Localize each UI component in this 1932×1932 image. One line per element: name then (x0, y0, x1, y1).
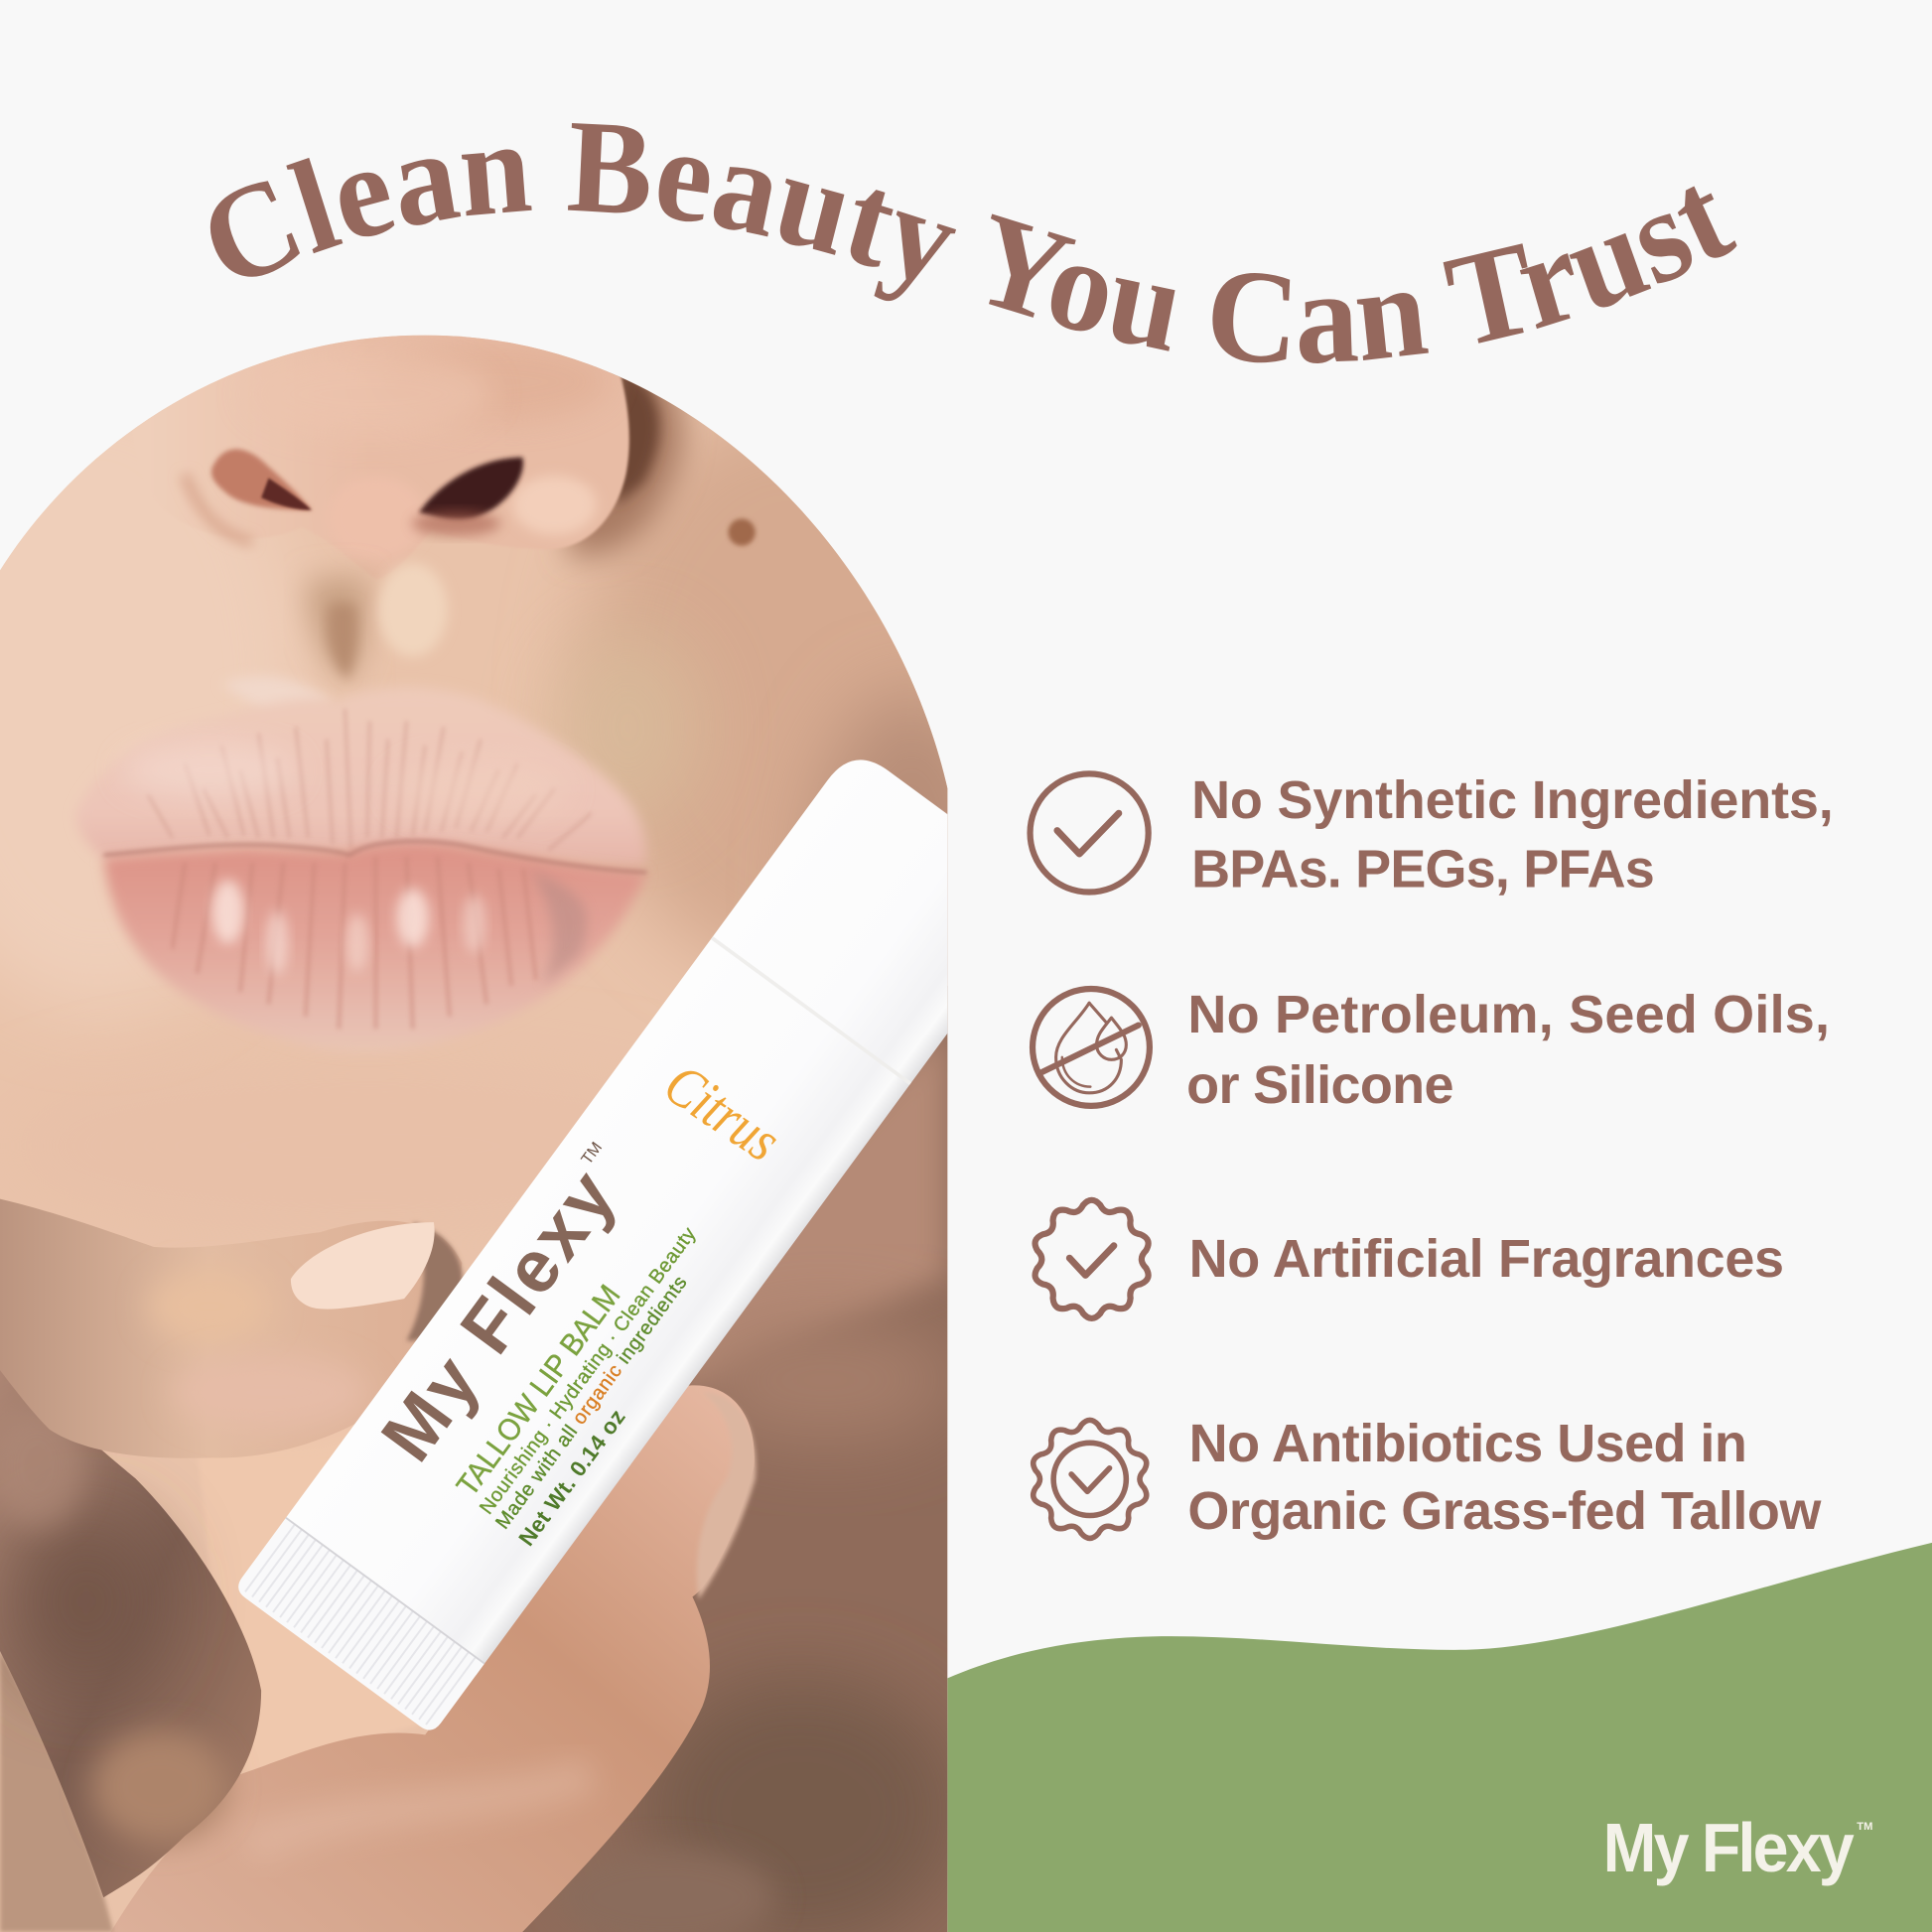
lower finger (111, 1385, 756, 1932)
upper lip (76, 687, 645, 865)
ribbed cap (233, 1518, 484, 1735)
wrist wedge (0, 1651, 113, 1932)
balm label: flavor: Citrus (653, 1050, 792, 1173)
tube body (286, 759, 947, 1676)
left nostril (211, 449, 312, 510)
text: synthetic ingredients: BPAs. PEGs, PFAs (1191, 840, 1655, 899)
icon: crossed oil drops (1033, 989, 1150, 1106)
nail (291, 1222, 435, 1310)
text: petroleum: or Silicone (1186, 1055, 1453, 1115)
benefit 2 (1033, 985, 1830, 1115)
text: fragrances: No Artificial Fragrances (1189, 1229, 1784, 1289)
cheek shadow beside nose (567, 336, 683, 556)
philtrum (230, 562, 448, 705)
face shading (0, 417, 947, 1072)
balm label: brand: My Flexy (365, 1156, 630, 1475)
thumb (0, 1199, 463, 1458)
balm label: ingredients: Made with all organic ingredients (491, 1272, 692, 1533)
middle finger (0, 1365, 261, 1897)
nose (141, 336, 631, 550)
benefit 4 (1034, 1414, 1822, 1541)
seam (712, 938, 910, 1084)
icon: check circle (1031, 773, 1149, 893)
lip balm tube (238, 759, 947, 1730)
title: Clean Beauty You Can Trust (210, 123, 1737, 363)
benefit 3 (1035, 1200, 1784, 1318)
mouth line (103, 841, 647, 873)
benefit 1 (1031, 770, 1834, 899)
face base (0, 321, 947, 1932)
lower lip (103, 843, 647, 1052)
logo wordmark: My Flexy (1603, 1810, 1855, 1887)
text: antibiotics: Organic Grass-fed Tallow (1187, 1481, 1822, 1541)
left nostril shadow (261, 479, 312, 510)
icon: badge circle check (1034, 1420, 1147, 1538)
balm label: trademark: TM (578, 1139, 606, 1168)
right nostril rim (412, 511, 500, 536)
text: antibiotics: No Antibiotics Used in (1189, 1414, 1747, 1473)
icon: badge check (1035, 1200, 1149, 1318)
balm label: weight: Net Wt. 0.14 oz (514, 1405, 630, 1551)
right nostril (419, 457, 523, 519)
green wave (947, 1543, 1932, 1932)
balm label: benefits: Nourishing · Hydrating · Clean Beauty (476, 1223, 700, 1518)
logo (1603, 1810, 1872, 1887)
mole (728, 518, 756, 546)
photo panel: lips and lip balm (0, 336, 947, 1932)
logo trademark: TM (1857, 1821, 1872, 1833)
text: synthetic ingredients: No Synthetic Ingredients, (1191, 770, 1834, 830)
balm label: product name: TALLOW LIP BALM (450, 1279, 627, 1502)
text: petroleum: No Petroleum, Seed Oils, (1187, 985, 1830, 1044)
neck and background (198, 986, 961, 1932)
